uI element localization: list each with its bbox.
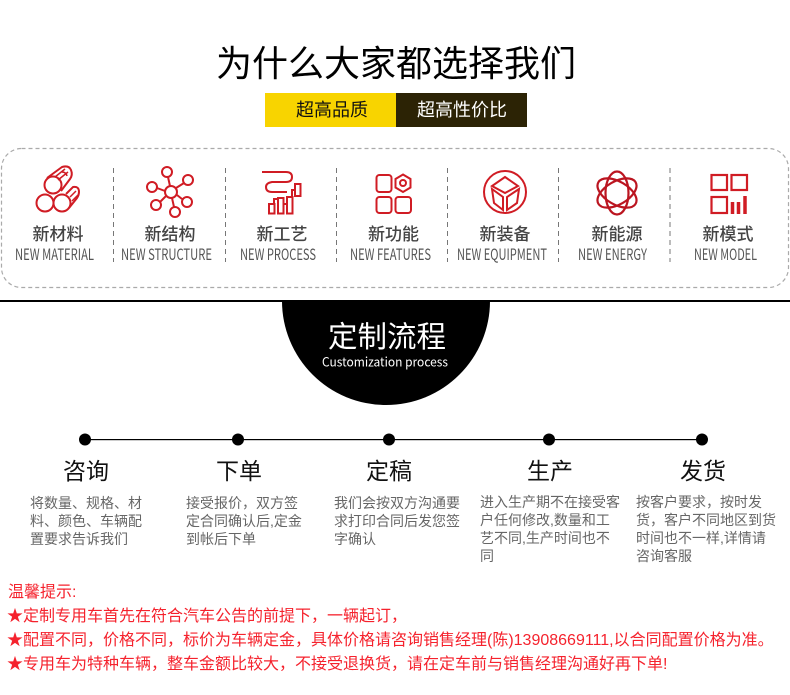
step: finalize draft: 字确认 (334, 531, 376, 547)
step: shipping: 货，客户不同地区到货 (636, 512, 776, 528)
step: production: 户任何修改,数量和工 (480, 512, 610, 528)
step: shipping: 咨询客服 (636, 548, 692, 564)
item: new features (350, 174, 431, 265)
notes: warm tips: 温馨提示: (8, 583, 76, 601)
item: new equipment (457, 171, 547, 265)
step: finalize draft: 定稿 (366, 458, 412, 484)
item: new material (15, 166, 94, 265)
item: new material: NEW MATERIAL (15, 243, 94, 265)
step: order: 接受报价，双方签 (186, 495, 298, 511)
step: order: 定合同确认后,定金 (186, 513, 302, 529)
step: shipping: 发货 (680, 458, 726, 484)
step: shipping: 按客户要求，按时发 (636, 494, 762, 510)
panel: seven new features (2, 148, 788, 288)
step: finalize draft: 求打印合同后发您签 (334, 513, 460, 529)
notes: warm tips (7, 583, 774, 673)
item: new structure: 新结构 (144, 220, 196, 245)
icon: cube in circle (484, 171, 526, 213)
subtitle badges: 超高品质 (296, 100, 368, 120)
step: shipping: 时间也不一样,详情请 (636, 530, 766, 546)
subtitle badges: 超高性价比 (417, 100, 507, 120)
item: new process: 新工艺 (256, 220, 308, 245)
item: new structure: NEW STRUCTURE (121, 243, 212, 265)
subtitle badges (265, 93, 527, 127)
item: new features: NEW FEATURES (350, 243, 431, 265)
item: new features: 新功能 (368, 220, 419, 245)
step: order (186, 458, 302, 547)
item: new process (240, 172, 316, 265)
step: consult: 咨询 (63, 458, 109, 484)
step: consult: 料、颜色、车辆配 (30, 513, 142, 529)
step: production: 生产 (527, 458, 573, 484)
item: new equipment: 新装备 (480, 220, 530, 245)
step: production: 同 (480, 548, 494, 564)
step: consult (30, 458, 142, 547)
notes: warm tips: ★配置不同，价格不同，标价为车辆定金，具体价格请咨询销售经理(陈)13908669111,以合同配置价格为准。 (7, 631, 774, 649)
step: production: 艺不同,生产时间也不 (480, 530, 610, 546)
item: new energy: 新能源 (592, 220, 642, 245)
item: new model: NEW MODEL (694, 243, 757, 265)
notes: warm tips: ★定制专用车首先在符合汽车公告的前提下，一辆起订， (7, 607, 407, 625)
step: production: 进入生产期不在接受客 (480, 494, 620, 510)
step: finalize draft: 我们会按双方沟通要 (334, 495, 460, 511)
item: new model (694, 175, 757, 265)
timeline (79, 434, 708, 446)
icon: pipes (36, 166, 79, 212)
icon: process bars (262, 172, 300, 214)
item: new energy (578, 172, 648, 265)
item: new energy: NEW ENERGY (578, 243, 648, 265)
notes: warm tips: ★专用车为特种车辆，整车金额比较大，不接受退换货，请在定车前与销售经理沟通好再下单! (7, 655, 667, 673)
section header: customization process (0, 300, 790, 405)
item: new equipment: NEW EQUIPMENT (457, 243, 547, 265)
step: shipping (636, 458, 776, 564)
item: new process: NEW PROCESS (240, 243, 316, 265)
item: new structure (121, 167, 212, 265)
section header: customization process: 定制流程 (328, 321, 446, 354)
step: order: 下单 (216, 458, 262, 484)
item: new model: 新模式 (702, 220, 754, 245)
icon: atom (593, 172, 641, 214)
step: finalize draft (334, 458, 460, 547)
section header: customization process: Customization process (322, 352, 448, 370)
icon: network nodes (147, 167, 193, 217)
step: consult: 将数量、规格、材 (30, 495, 142, 511)
item: new material: 新材料 (32, 220, 84, 245)
step: consult: 置要求告诉我们 (30, 531, 128, 547)
step: order: 到帐后下单 (186, 531, 256, 547)
step: production (480, 458, 620, 564)
icon: squares and hex nut (376, 174, 411, 213)
icon: squares and bars (712, 175, 747, 214)
title: 为什么大家都选择我们 (216, 43, 576, 84)
